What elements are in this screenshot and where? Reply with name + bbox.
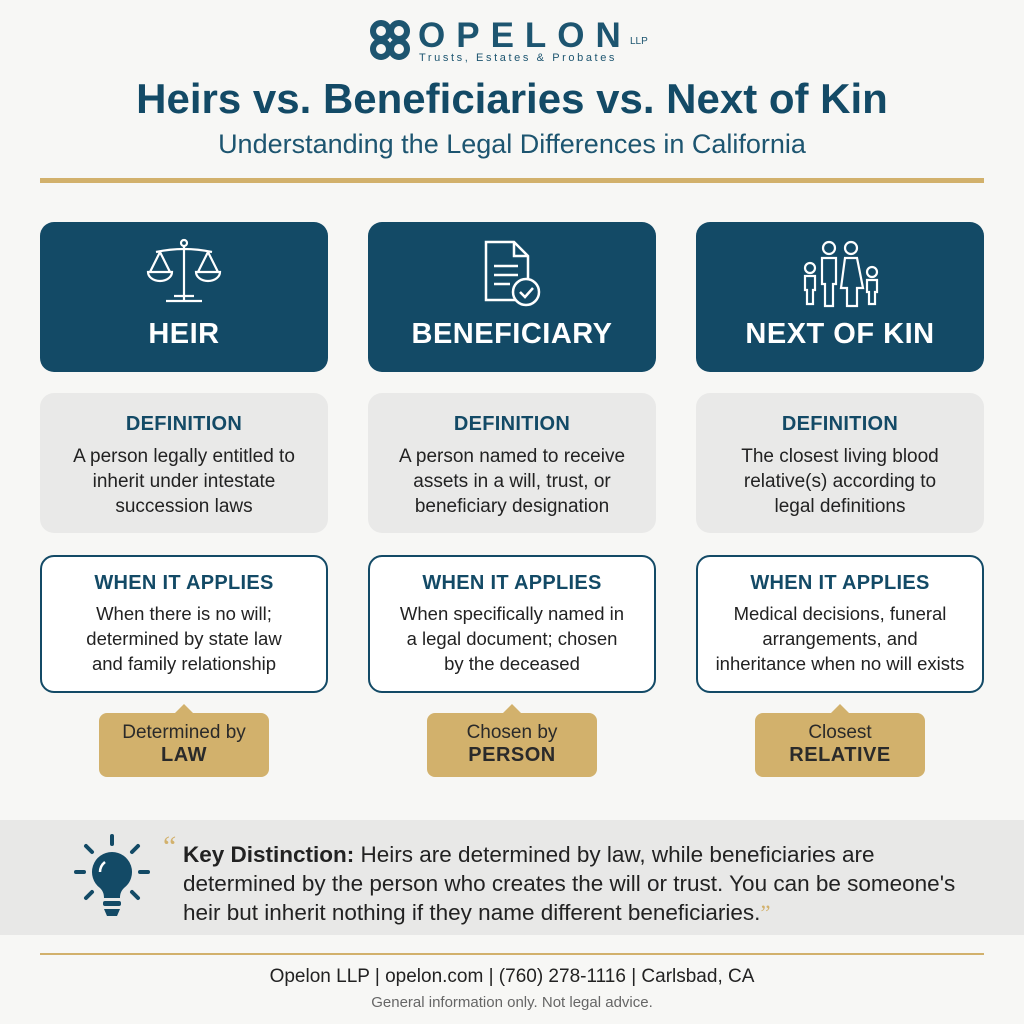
panel: heir definition (40, 393, 328, 533)
badge: relative: Closest (808, 722, 872, 743)
panel: heir when it applies: determined by state law (86, 628, 282, 649)
badge: relative (755, 713, 925, 777)
badge: person (427, 713, 597, 777)
badge: law: LAW (161, 744, 207, 766)
panel: beneficiary when it applies: WHEN IT APPLIES (422, 572, 602, 594)
panel: heir definition: inherit under intestate (93, 471, 275, 492)
panel: beneficiary when it applies: a legal document; chosen (407, 628, 617, 649)
panel: next of kin when it applies: inheritance when no will exists (716, 653, 964, 674)
icon: logo knot (370, 20, 410, 60)
panel: next of kin header: NEXT OF KIN (745, 318, 935, 350)
panel: next of kin definition: legal definitions (774, 496, 905, 517)
footer: Opelon LLP | opelon.com | (760) 278-1116 | Carlsbad, CA (270, 966, 754, 987)
badge: person: Chosen by (467, 722, 557, 743)
panel: beneficiary when it applies: When specifically named in (400, 603, 624, 624)
panel: heir header (40, 222, 328, 372)
callout: key distinction: determined by the person who creates the will or trust. You can be someone's (183, 871, 955, 896)
panel: beneficiary when it applies: by the deceased (444, 653, 580, 674)
badge: law: Determined by (122, 722, 246, 743)
panel: beneficiary header: BENEFICIARY (412, 318, 612, 350)
panel: beneficiary when it applies (368, 555, 656, 693)
icon: document check (484, 240, 540, 306)
icon: lightbulb (74, 834, 150, 916)
badge: person: PERSON (468, 744, 556, 766)
icon: scales (146, 238, 222, 302)
panel: next of kin when it applies: arrangements, and (762, 628, 918, 649)
panel: next of kin definition: The closest living blood (741, 446, 939, 467)
panel: next of kin when it applies (696, 555, 984, 693)
logo: LLP (630, 36, 648, 47)
panel: heir when it applies: When there is no will; (96, 603, 272, 624)
badge: relative: RELATIVE (789, 744, 891, 766)
panel: beneficiary definition: beneficiary designation (415, 496, 609, 517)
disclaimer: General information only. Not legal advice. (371, 994, 653, 1011)
subtitle: Understanding the Legal Differences in California (218, 129, 806, 159)
panel: heir when it applies: WHEN IT APPLIES (94, 572, 274, 594)
panel: next of kin definition (696, 393, 984, 533)
panel: beneficiary definition (368, 393, 656, 533)
panel: beneficiary definition: A person named to receive (399, 446, 625, 467)
panel: beneficiary definition: DEFINITION (454, 413, 570, 435)
panel: heir definition: DEFINITION (126, 413, 242, 435)
panel: beneficiary definition: assets in a will, trust, or (413, 471, 611, 492)
panel: heir definition: succession laws (115, 496, 253, 517)
callout: key distinction (0, 820, 1024, 935)
panel: beneficiary header (368, 222, 656, 372)
logo: Trusts, Estates & Probates (419, 52, 617, 64)
logo (370, 16, 648, 64)
panel: next of kin when it applies: WHEN IT APPLIES (750, 572, 930, 594)
logo: OPELON (418, 16, 632, 55)
badge: law (99, 713, 269, 777)
title: Heirs vs. Beneficiaries vs. Next of Kin (136, 75, 888, 122)
panel: heir header: HEIR (148, 318, 220, 350)
panel: next of kin definition: DEFINITION (782, 413, 898, 435)
icon: family (804, 240, 878, 308)
callout: key distinction: heir but inherit nothing if they name different beneficiaries.” (183, 900, 770, 925)
panel: heir definition: A person legally entitled to (73, 446, 295, 467)
panel: heir when it applies: and family relationship (92, 653, 276, 674)
panel: next of kin definition: relative(s) according to (744, 471, 936, 492)
panel: next of kin header (696, 222, 984, 372)
callout: key distinction: “ (163, 830, 176, 863)
callout: key distinction: Key Distinction: Heirs are determined by law, while beneficiaries are (183, 842, 875, 867)
panel: heir when it applies (40, 555, 328, 693)
panel: next of kin when it applies: Medical decisions, funeral (734, 603, 946, 624)
